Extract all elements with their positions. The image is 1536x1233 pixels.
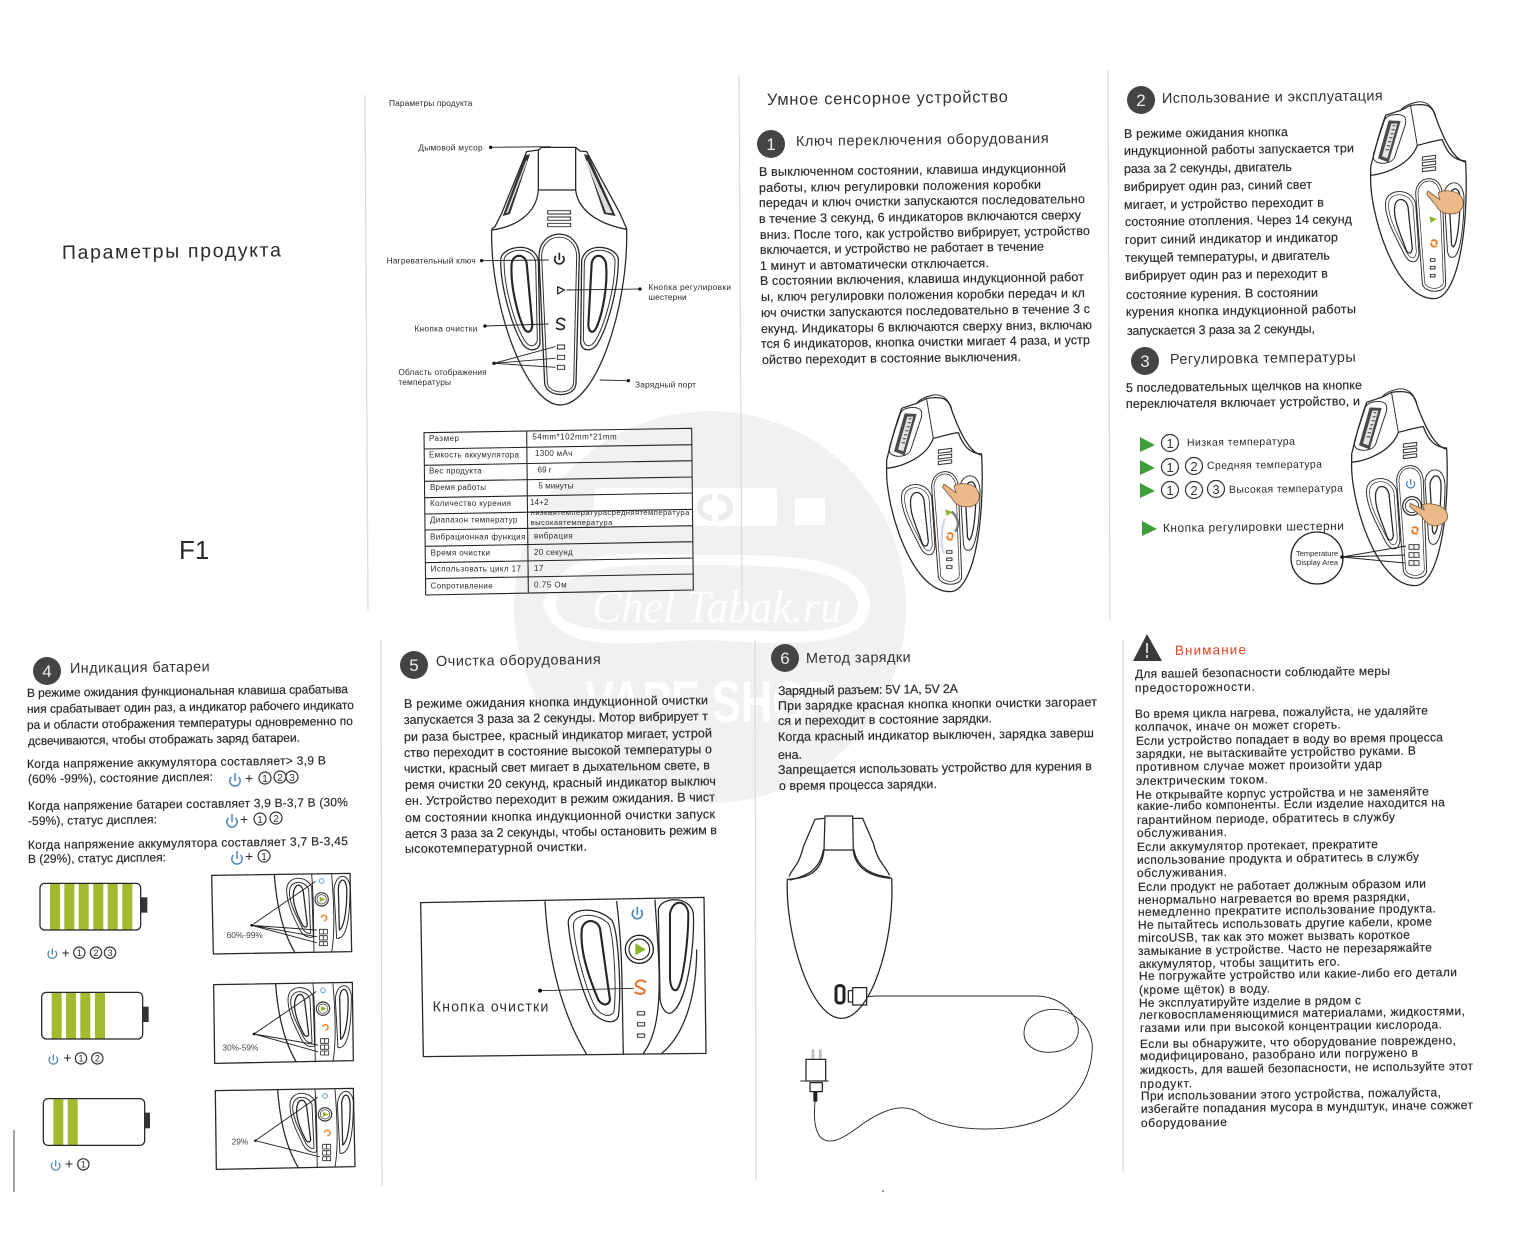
body text: дсвечиваются, чтобы отображать заряд батареи. — [28, 731, 300, 748]
formula: power plus 1 — [51, 1156, 89, 1172]
panel: section 3 temperature adjustment — [1126, 347, 1448, 586]
formula: power plus 1 2 3: 3 — [107, 948, 113, 958]
body text — [759, 161, 1092, 367]
scan edge mark — [14, 1130, 884, 1192]
table labels — [429, 434, 525, 590]
panel: cover title — [62, 239, 281, 565]
body text: текущей температуры, и двигатель — [1125, 248, 1330, 265]
body text: вибрирует один раз и переходит в — [1125, 267, 1328, 283]
formula: power plus 1 2 3: 1 — [77, 948, 82, 958]
safety body text: какие-либо компоненты. Если изделие находится на — [1137, 795, 1445, 813]
table values: 17 — [534, 564, 544, 573]
label: smoke debris — [418, 143, 550, 153]
device with button press — [1352, 389, 1448, 586]
safety body text: Не открывайте корпус устройства и не заменяйте — [1136, 784, 1429, 802]
body text: раза за 2 секунды, двигатель — [1124, 160, 1292, 176]
level: high temperature — [1140, 480, 1343, 498]
body text: ра и области отображения температуры одновременно по — [27, 714, 353, 732]
status formula 1: 3 — [289, 773, 295, 784]
title: product parameters: Параметры продукта — [62, 239, 281, 264]
page fold lines — [365, 70, 1123, 1186]
icon: cleaning symbol orange — [635, 980, 646, 994]
safety body text: немедленно прекратите использование продукта. — [1138, 901, 1436, 919]
body text: в течение 3 секунд, 6 индикаторов включаются сверху — [759, 208, 1082, 226]
label: charging port: Зарядный порт — [635, 379, 696, 389]
heading: switch key: Ключ переключения оборудования — [796, 131, 1049, 150]
formula: power plus 1: + — [65, 1156, 73, 1172]
panel: section 4 battery indication text — [27, 657, 354, 866]
badge 6: 6 — [780, 649, 790, 668]
intro text: 5 последовательных щелчков на кнопке — [1126, 378, 1362, 395]
icon: play button — [625, 935, 653, 963]
body text: Когда напряжение аккумулятора составляет> 3,9 В — [27, 753, 326, 771]
body text: горит синий индикатор и индикатор — [1125, 230, 1338, 247]
safety body text: ненормально нагревается во время разрядки, — [1138, 890, 1410, 907]
table labels: Сопротивление — [431, 581, 493, 590]
safety body text — [1135, 664, 1473, 1130]
indicator bars — [637, 1012, 645, 1037]
table labels: Время работы — [430, 483, 486, 492]
status formula 1: 1 — [262, 774, 268, 785]
watermark: Chel Tabak vape shop disc: Chel Tabak.ru — [592, 581, 842, 632]
body text: Зарядный разъем: 5V 1A, 5V 2A — [778, 682, 959, 698]
panel: warnings — [1133, 634, 1473, 1130]
body text: (60% -99%), состояние дисплея: — [28, 770, 213, 786]
body text: ысокотемпературной очистки. — [405, 840, 587, 856]
heading: charging method: Метод зарядки — [806, 650, 911, 667]
safety body text: обслуживания. — [1137, 825, 1227, 840]
body text: ена. — [778, 748, 802, 762]
body text: передач и ключ очистки запускаются последовательно — [759, 192, 1085, 210]
wall adapter — [801, 1049, 828, 1102]
badge 1: 1 — [766, 135, 776, 154]
display panel 29 percent: 29% — [232, 1136, 249, 1146]
table labels: Вибрационная функция — [430, 532, 525, 541]
cleaning leader line — [538, 988, 633, 993]
level: medium temperature — [1140, 458, 1322, 476]
label: cleaning button: Кнопка очистки — [414, 324, 478, 334]
body text: Когда напряжение аккумулятора составляет 3,7 В-3,45 — [28, 834, 348, 852]
status formula 3: + — [245, 848, 253, 864]
charging cable — [814, 996, 1092, 1141]
heading: attention: Внимание — [1175, 642, 1246, 658]
label: gear adjust button: Кнопка регулировки — [648, 282, 731, 292]
formula: power plus 1 2 3: + — [62, 944, 70, 960]
table values: 5 минуты — [538, 482, 574, 491]
body text: В (29%), статус дисплея: — [28, 850, 166, 866]
level: high temperature: 2 — [1190, 483, 1198, 498]
level: medium temperature: 2 — [1190, 459, 1198, 474]
micro USB port — [836, 986, 844, 1003]
safety body text: mircoUSB, так как это может вызвать короткое — [1138, 928, 1410, 945]
panel: section 5 cleaning — [400, 651, 717, 1057]
body text: -59%), статус дисплея: — [28, 812, 157, 828]
table values — [530, 433, 690, 590]
body text: ство переходит в состояние высокой температуры о — [404, 742, 712, 760]
body text: состояние курения. В состоянии — [1126, 286, 1318, 302]
safety body text: Если аккумулятор протекает, прекратите — [1137, 837, 1378, 854]
safety body text: избегайте попадания мусора в мундштук, иначе сожжет — [1141, 1098, 1473, 1116]
intro text — [1126, 378, 1362, 411]
safety body text: электрическим током. — [1136, 772, 1268, 788]
status formula 2: 2 — [273, 814, 279, 825]
body text — [778, 682, 1097, 793]
body text: вниз. После того, как устройство вибрирует, устройство — [760, 224, 1090, 242]
table values: 14+2 — [530, 498, 549, 507]
table values: 1300 мАч — [535, 449, 572, 458]
status formula 2: 1 — [257, 815, 263, 826]
icon: warning triangle — [1133, 634, 1162, 661]
table labels: Размер — [429, 434, 460, 443]
model name F1: F1 — [179, 535, 209, 565]
status formula 1: + — [245, 770, 253, 786]
body text: В режиме ожидания кнопка — [1124, 125, 1288, 141]
safety body text: продукт. — [1140, 1076, 1192, 1091]
level: medium temperature: 1 — [1166, 460, 1174, 475]
body text: ся и переходит в состояние зарядки. — [778, 711, 992, 728]
table values: высокаятемпература — [531, 518, 613, 527]
safety body text: Если продукт не работает должным образом или — [1138, 876, 1426, 894]
safety body text: Не пытайтесь использовать другие кабели, кроме — [1138, 914, 1432, 932]
table values: 54mm*102mm*21mm — [532, 433, 617, 442]
safety body text: зарядки, не вытаскивайте устройство руками. В — [1136, 744, 1416, 761]
device back view — [787, 816, 892, 1018]
battery icon: medium — [42, 992, 149, 1039]
level: low temperature — [1140, 434, 1295, 452]
watermark: Chel Tabak vape shop disc: VAPE SHOP — [585, 670, 835, 735]
label: temperature display area: температуры — [398, 377, 451, 387]
panel: smart touch device section 1 — [757, 88, 1092, 592]
body text: Когда напряжение батареи составляет 3,9 В-3,7 В (30% — [28, 795, 348, 813]
safety body text: обслуживания. — [1137, 865, 1227, 880]
battery icon: full — [40, 883, 147, 930]
safety body text: газами или при высокой концентрации кислорода. — [1140, 1017, 1442, 1035]
safety body text: аккумулятор, чтобы защитить его. — [1139, 955, 1340, 971]
formula: power plus 1 2: + — [63, 1050, 72, 1066]
table labels: Время очистки — [431, 548, 490, 557]
safety body text: гарантийном периоде, обратитесь в службу — [1137, 810, 1395, 827]
heading: smart touch device: Умное сенсорное устройство — [767, 88, 1008, 109]
safety body text: Не погружайте устройство или какие-либо его детали — [1139, 965, 1457, 983]
panel: section 2 usage — [1124, 86, 1466, 338]
label: cleaning button: Кнопка очистки — [433, 1000, 548, 1016]
table labels: Количество курения — [430, 499, 511, 508]
body text: юч очистки запускаются последовательно в течение 3 с — [761, 302, 1090, 320]
table labels: Использовать цикл 17 — [431, 565, 522, 574]
body text: тся 6 индикаторов, кнопка очистки мигает 4 раза, и устр — [761, 333, 1090, 351]
badge 2: 2 — [1136, 91, 1146, 110]
charging plug — [848, 988, 867, 1005]
label: temperature display area: Область отображения — [398, 367, 487, 377]
display panel 29 percent — [215, 1088, 355, 1169]
status formula 2: + — [240, 811, 248, 827]
heading: temperature adjustment: Регулировка температуры — [1170, 350, 1356, 368]
body text: включается, и устройство не работает в течение — [760, 240, 1044, 257]
body text: ом состоянии кнопка индукционной очистки запуск — [405, 807, 716, 825]
table values: 20 секунд — [534, 548, 573, 557]
body text: екунд. Индикаторы 6 включаются сверху вниз, включаю — [761, 318, 1092, 336]
table values: 0.75 Ом — [534, 581, 567, 590]
body text: ен. Устройство переходит в режим ожидания. В чист — [405, 790, 715, 808]
level: high temperature: Высокая температура — [1229, 483, 1343, 496]
label: charging port — [600, 379, 696, 389]
table values: низкаятемпературасредняятемпература — [531, 508, 690, 517]
table values: вибрация — [534, 531, 573, 540]
level: high temperature: 3 — [1212, 482, 1220, 497]
formula: power plus 1 2: 1 — [78, 1054, 84, 1064]
display panel 30-59 percent: 30%-59% — [222, 1043, 259, 1053]
badge 3: 3 — [1140, 352, 1150, 371]
status formula 3: 1 — [261, 852, 267, 863]
formula: power plus 1 2: 2 — [95, 1054, 100, 1064]
callout: temperature display area: Temperature — [1296, 549, 1338, 558]
device with hand pressing — [1371, 102, 1466, 299]
safety body text: использование продукта и обратитесь в службу — [1137, 850, 1419, 867]
safety body text: замыкание в устройстве. Часто не перезаряжайте — [1138, 940, 1432, 958]
status formula 1: 2 — [277, 773, 283, 784]
table labels: Диапазон температур — [430, 516, 518, 525]
body text: курения кнопка индукционной работы — [1126, 302, 1356, 319]
icon: power blue — [632, 907, 642, 919]
safety body text: Не эксплуатируйте изделие в рядом с — [1139, 993, 1361, 1010]
body text: Когда красный индикатор выключен, зарядка заверш — [778, 726, 1094, 744]
body text: ается 3 раза за 2 секунды, чтобы остановить режим в — [405, 823, 717, 841]
display panel 30-59 percent — [214, 982, 353, 1063]
label: gear adjust button: шестерни — [648, 292, 687, 302]
panel: section 6 charging — [771, 644, 1097, 1141]
level: low temperature: Низкая температура — [1187, 436, 1295, 449]
badge 3 — [1131, 347, 1159, 375]
label: heating key: Нагревательный ключ — [387, 255, 476, 265]
battery icon: low — [43, 1099, 150, 1145]
safety body text: противном случае может произойти удар — [1136, 757, 1382, 774]
intro text: переключателя включает устройство, и — [1126, 394, 1360, 411]
gear adjust button label: Кнопка регулировки шестерни — [1163, 519, 1344, 535]
body text: В выключенном состоянии, клавиша индукционной — [759, 161, 1066, 179]
level: low temperature: 1 — [1166, 436, 1174, 451]
label: gear adjust button — [567, 282, 731, 302]
display panel 60-99 percent: 60%-99% — [227, 930, 263, 940]
status formula 1 — [230, 770, 298, 786]
badge 1 — [757, 130, 785, 158]
status formula 2 — [227, 811, 282, 827]
heading: equipment cleaning: Очистка оборудования — [436, 652, 601, 670]
cleaning button close-up — [421, 897, 706, 1057]
safety body text: предосторожности. — [1135, 680, 1255, 695]
device with hand and arrows — [887, 395, 982, 592]
body text: В режиме ожидания функциональная клавиша срабатыва — [27, 682, 348, 700]
safety body text: При использовании этого устройства, пожалуйста, — [1141, 1085, 1441, 1103]
safety body text: Во время цикла нагрева, пожалуйста, не удаляйте — [1135, 703, 1428, 721]
formula: power plus 1 2 — [49, 1050, 103, 1066]
body text: запускается 3 раза за 2 секунды, — [1127, 322, 1315, 338]
safety body text: Если устройство попадает в воду во время процесса — [1136, 730, 1443, 748]
body text: В режиме ожидания кнопка индукционной очистки — [404, 693, 708, 711]
safety body text: Если вы обнаружите, что оборудование повреждено, — [1140, 1033, 1456, 1051]
body text: о время процесса зарядки. — [779, 777, 937, 793]
badge 4 — [33, 657, 61, 685]
panel: battery levels — [40, 873, 355, 1172]
safety body text: жидкость, для вашей безопасности, не используйте этот — [1140, 1059, 1473, 1077]
badge 4: 4 — [42, 662, 52, 681]
body text: ойство переходит в состояние выключения. — [762, 350, 1021, 367]
body text: 1 минут и автоматически отключается. — [760, 256, 989, 273]
label: smoke debris: Дымовой мусор — [418, 143, 483, 153]
level: high temperature: 1 — [1166, 483, 1174, 498]
specification table — [424, 428, 693, 595]
safety body text: Для вашей безопасности соблюдайте меры — [1135, 664, 1390, 681]
body text: В состоянии включения, клавиша индукционной работ — [760, 270, 1084, 288]
badge 2 — [1127, 86, 1155, 114]
body text: Запрещается использовать устройство для курения в — [778, 759, 1092, 777]
callout: temperature display area: Display Area — [1296, 558, 1339, 567]
watermark: Chel Tabak vape shop disc — [514, 411, 906, 803]
body text: мигает, и устройство переходит в — [1124, 196, 1324, 212]
label: temperature display area — [398, 347, 555, 387]
body text: вибрирует один раз, синий свет — [1124, 178, 1312, 194]
badge 5: 5 — [409, 656, 419, 675]
safety body text: (кроме щёток) в воду. — [1139, 981, 1270, 997]
body text: ремя очистки 20 секунд, красный индикатор выключ — [405, 774, 716, 792]
body text — [27, 682, 354, 866]
device front view — [492, 147, 627, 405]
safety body text: легковоспламеняющимися материалами, жидкостями, — [1139, 1004, 1465, 1022]
panel: product diagram with labels — [387, 98, 731, 405]
display panel 60-99 percent — [212, 873, 352, 954]
body text: ы, ключ регулировки положения коробки передач и кл — [761, 286, 1085, 304]
small heading: Параметры продукта — [389, 98, 473, 108]
table labels: Вес продукта — [429, 467, 482, 476]
safety body text: модифицировано, разобрано или погружено в — [1140, 1046, 1418, 1063]
body text: ри раза быстрее, красный индикатор мигает, устрой — [404, 726, 712, 744]
charging illustration — [787, 816, 1092, 1141]
body text: работы, ключ регулировки положения коробки — [759, 178, 1041, 195]
body text — [404, 693, 717, 856]
formula: power plus 1 2 3: 2 — [93, 948, 99, 958]
table values: 69 г — [538, 466, 552, 475]
heading: battery indication: Индикация батареи — [70, 659, 210, 677]
body text: индукционной работы запускается три — [1124, 141, 1354, 158]
body text: запускается 3 раза за 2 секунды. Мотор вибрирует т — [404, 709, 708, 727]
body text: ния срабатывает один раз, а индикатор рабочего индикато — [27, 698, 354, 716]
label: cleaning button — [414, 324, 548, 334]
safety body text: оборудование — [1141, 1115, 1227, 1130]
body text: При зарядке красная кнопка кнопки очистки загорает — [778, 695, 1097, 713]
formula: power plus 1 2 3 — [48, 944, 116, 960]
status formula 3 — [232, 848, 270, 864]
callout: temperature display area — [1291, 532, 1406, 584]
label: heating key — [387, 255, 548, 265]
safety body text: колпачок, иначе он может сгореть. — [1135, 717, 1341, 734]
badge 5 — [400, 651, 428, 679]
table labels: Емкость аккумулятора — [429, 450, 520, 459]
badge 6 — [771, 644, 799, 672]
heading: use and operation: Использование и эксплуатация — [1162, 88, 1383, 107]
body text — [1124, 125, 1356, 338]
body text: чистки, красный свет мигает в дыхательном свете, в — [404, 758, 710, 776]
formula: power plus 1: 1 — [81, 1160, 86, 1170]
level: medium temperature: Средняя температура — [1207, 459, 1322, 472]
body text: состояние отопления. Через 14 секунд — [1125, 212, 1353, 229]
